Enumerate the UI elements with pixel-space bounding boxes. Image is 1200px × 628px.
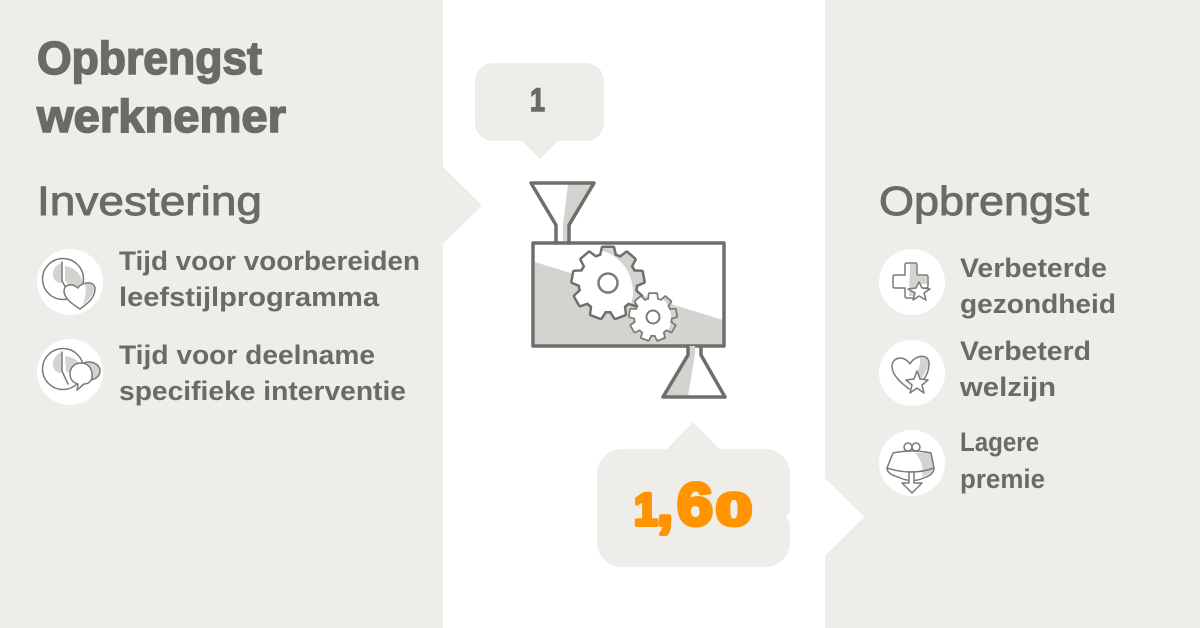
callout: output 1,60: 0: [716, 484, 752, 535]
bottom funnel: [663, 346, 725, 397]
icon: machine with funnels and gears: [531, 183, 725, 397]
top funnel: [531, 183, 594, 243]
panel: opbrengst: [825, 0, 1200, 628]
title: Opbrengst: [37, 32, 262, 84]
text: tijd voor voorbereiden: Tijd voor voorbereiden: [119, 246, 420, 276]
text: verbeterd welzijn: welzijn: [959, 372, 1056, 402]
text: tijd voor deelname: [119, 340, 406, 406]
big gear: [572, 248, 644, 318]
text: lagere premie: [960, 427, 1045, 494]
heading: investering: Investering: [37, 178, 262, 224]
text: verbeterd welzijn: [959, 336, 1091, 402]
text: tijd voor voorbereiden: leefstijlprogramma: [119, 282, 380, 312]
title: [36, 32, 286, 142]
text: lagere premie: premie: [960, 464, 1045, 494]
callout: output 1,60: ,: [657, 473, 673, 538]
text: tijd voor deelname: Tijd voor deelname: [119, 340, 375, 370]
icon: clock with heart: [37, 249, 103, 315]
panel: investering: [0, 0, 482, 628]
icon: clock with speech bubble: [37, 339, 103, 405]
icon: heart with star: [879, 340, 945, 406]
title: werknemer: [36, 90, 286, 142]
machine box: [533, 243, 724, 346]
callout: output 1,60: [597, 422, 790, 567]
small gear: [630, 294, 676, 340]
text: verbeterde gezondheid: Verbeterde: [960, 253, 1107, 283]
callout: input 1: 1: [530, 82, 545, 118]
callout: output 1,60: 6: [677, 471, 713, 538]
icon: purse with down arrow: [879, 430, 945, 496]
text: verbeterde gezondheid: [960, 253, 1116, 319]
text: tijd voor deelname: specifieke interventie: [119, 376, 406, 406]
text: verbeterd welzijn: Verbeterd: [960, 336, 1091, 366]
icon: plus with star: [879, 249, 945, 315]
text: lagere premie: Lagere: [960, 427, 1039, 457]
callout: output 1,60: 1: [634, 484, 658, 535]
callout: input 1: [475, 63, 604, 159]
text: verbeterde gezondheid: gezondheid: [960, 289, 1116, 319]
heading: opbrengst: Opbrengst: [879, 178, 1090, 224]
text: tijd voor voorbereiden: [119, 246, 420, 312]
